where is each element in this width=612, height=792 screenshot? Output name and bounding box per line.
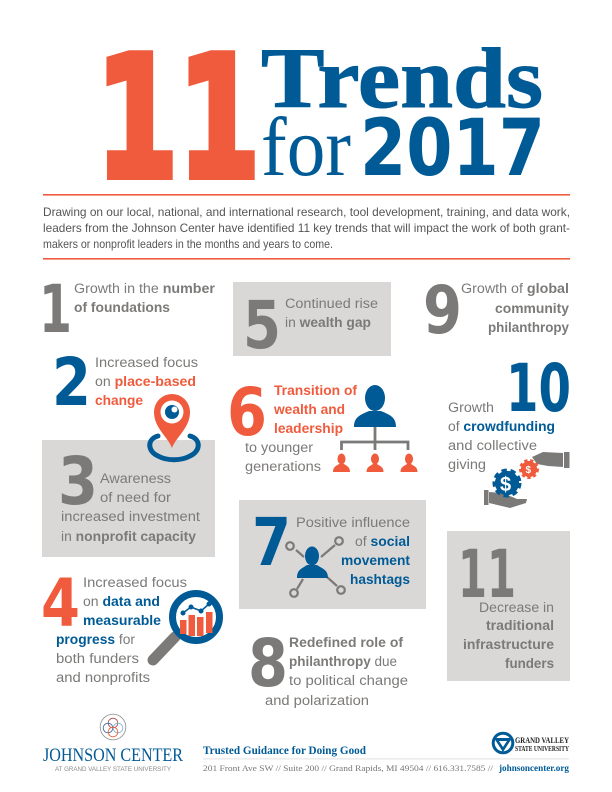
trend 4 text [56,575,187,686]
trend 7 text: movement [341,553,410,569]
trend 5 text: Continued rise [285,296,378,312]
trend 6 text: generations [245,459,321,475]
trend 4 text: on data and [83,594,160,610]
trend 5 [243,287,378,364]
number 1: 1 [39,271,72,348]
trend 1 text: Growth in the number [74,281,215,297]
trend 6 text: to younger [245,440,313,456]
GVSU emblem [492,732,514,754]
panel: trend 5 background [233,282,391,356]
trend 9 text [461,281,569,336]
footer [203,745,569,774]
icon: leader with three successors [333,385,418,472]
trend 11 text: Decrease in [479,600,554,616]
number 8: 8 [248,625,288,702]
intro text: Drawing on our local, national, and international research, tool development, training, and data work, [43,205,570,219]
intro text: makers or nonprofit leaders in the months and years to come. [43,237,333,251]
trend 1 [39,271,215,348]
trend 11 text: funders [505,656,554,672]
trend 1 text: of foundations [74,300,170,316]
panel: trend 11 background [447,531,570,681]
icon: hands exchanging money gears: $ [500,474,511,496]
trend 3 text: Awareness [100,471,171,487]
number 11: 11 [458,536,516,613]
trend 6 text: Transition of [274,383,357,399]
trend 8 text: philanthropy due [289,654,397,670]
trend 6 [227,374,418,475]
trend 3 text: in nonprofit capacity [61,529,196,545]
icon: connected person [286,537,345,597]
logo: Grand Valley State University [492,732,569,754]
trend 9 [423,272,569,349]
number 5: 5 [243,287,281,364]
trend 1 text [74,281,215,316]
trend 10 text: and collective [448,438,537,454]
trend 10 [448,350,571,508]
logo: Grand Valley State University: STATE UNIVERSITY [515,744,569,753]
trend 3 text: increased investment [61,509,200,525]
trend 6 text [245,383,357,475]
trend 2 text [95,355,198,409]
number 4: 4 [41,565,80,642]
trend 11 [458,536,554,672]
trend 3 text [61,471,200,545]
trend 5 text [285,296,378,331]
trend 11 text: infrastructure [463,637,554,653]
trend 8 text: Redefined role of [289,635,403,651]
trend 3 text: of need for [100,490,171,506]
panel: trend 3 background [42,440,215,557]
GVSU wordmark: GRAND VALLEY [515,735,569,745]
trend 2 [52,344,198,460]
trend 4 [41,565,220,686]
logo emblem [100,714,126,740]
trend 8 text [265,635,408,709]
number 10: 10 [506,350,571,427]
trend 4 text: Increased focus [83,575,187,591]
trend 4 text: measurable [83,613,161,629]
title [96,22,545,216]
number 7: 7 [252,504,291,581]
trend 10 text: of crowdfunding [448,419,555,435]
footer tagline: Trusted Guidance for Doing Good [203,745,367,757]
icon: magnifying glass with chart [153,594,220,660]
trend 8 text: and polarization [265,693,369,709]
number 2: 2 [52,344,91,421]
trend 8 text: to political change [289,673,408,689]
trend 2 text: on place-based [95,374,196,390]
trend 9 text: Growth of global [461,281,569,297]
intro text [43,205,570,251]
number 6: 6 [227,374,267,451]
logo: Johnson Center [43,714,183,773]
footer website: johnsoncenter.org [498,764,569,774]
icon: hands exchanging money gears: $ [526,465,532,476]
intro text: leaders from the Johnson Center have identified 11 key trends that will impact the work of both grant- [43,221,570,235]
trend 9 text: community [495,301,569,317]
big number 11: 11 [96,22,260,216]
icon: map pin [150,394,198,460]
heading word for: for [261,101,351,194]
trend 2 text: Increased focus [95,355,198,371]
icon: hands exchanging money gears [484,452,570,508]
trend 3 [58,443,200,545]
trend 4 text: both funders [56,651,139,667]
trend 4 text: and nonprofits [56,670,150,686]
logo tagline: AT GRAND VALLEY STATE UNIVERSITY [55,766,172,773]
trend 7 text [296,515,410,588]
trend 7 text: of social [355,534,410,550]
trend 4 text: progress for [56,632,135,648]
trend 7 text: Positive influence [296,515,410,531]
trend 10 text: giving [448,457,486,473]
panel: trend 7 background [239,500,426,609]
trend 9 text: philanthropy [488,320,569,336]
trend 5 text: in wealth gap [285,315,371,331]
trend 8 [248,625,408,709]
footer address: 201 Front Ave SW // Suite 200 // Grand Rapids, MI 49504 // 616.331.7585 // [203,763,494,773]
number 3: 3 [58,443,98,520]
trend 11 text: traditional [486,618,554,634]
trend 7 [252,504,410,597]
trend 10 text [448,400,555,473]
trend 11 text [463,600,554,672]
trend 2 text: change [95,393,143,409]
logo wordmark: JOHNSON CENTER [43,745,183,766]
trend 6 text: wealth and [273,402,345,418]
trend 10 text: Growth [448,400,494,416]
trend 6 text: leadership [274,421,343,437]
heading word Trends: Trends [261,30,543,126]
heading year 2017: 2017 [360,104,545,194]
number 9: 9 [423,272,462,349]
trend 7 text: hashtags [350,572,410,588]
